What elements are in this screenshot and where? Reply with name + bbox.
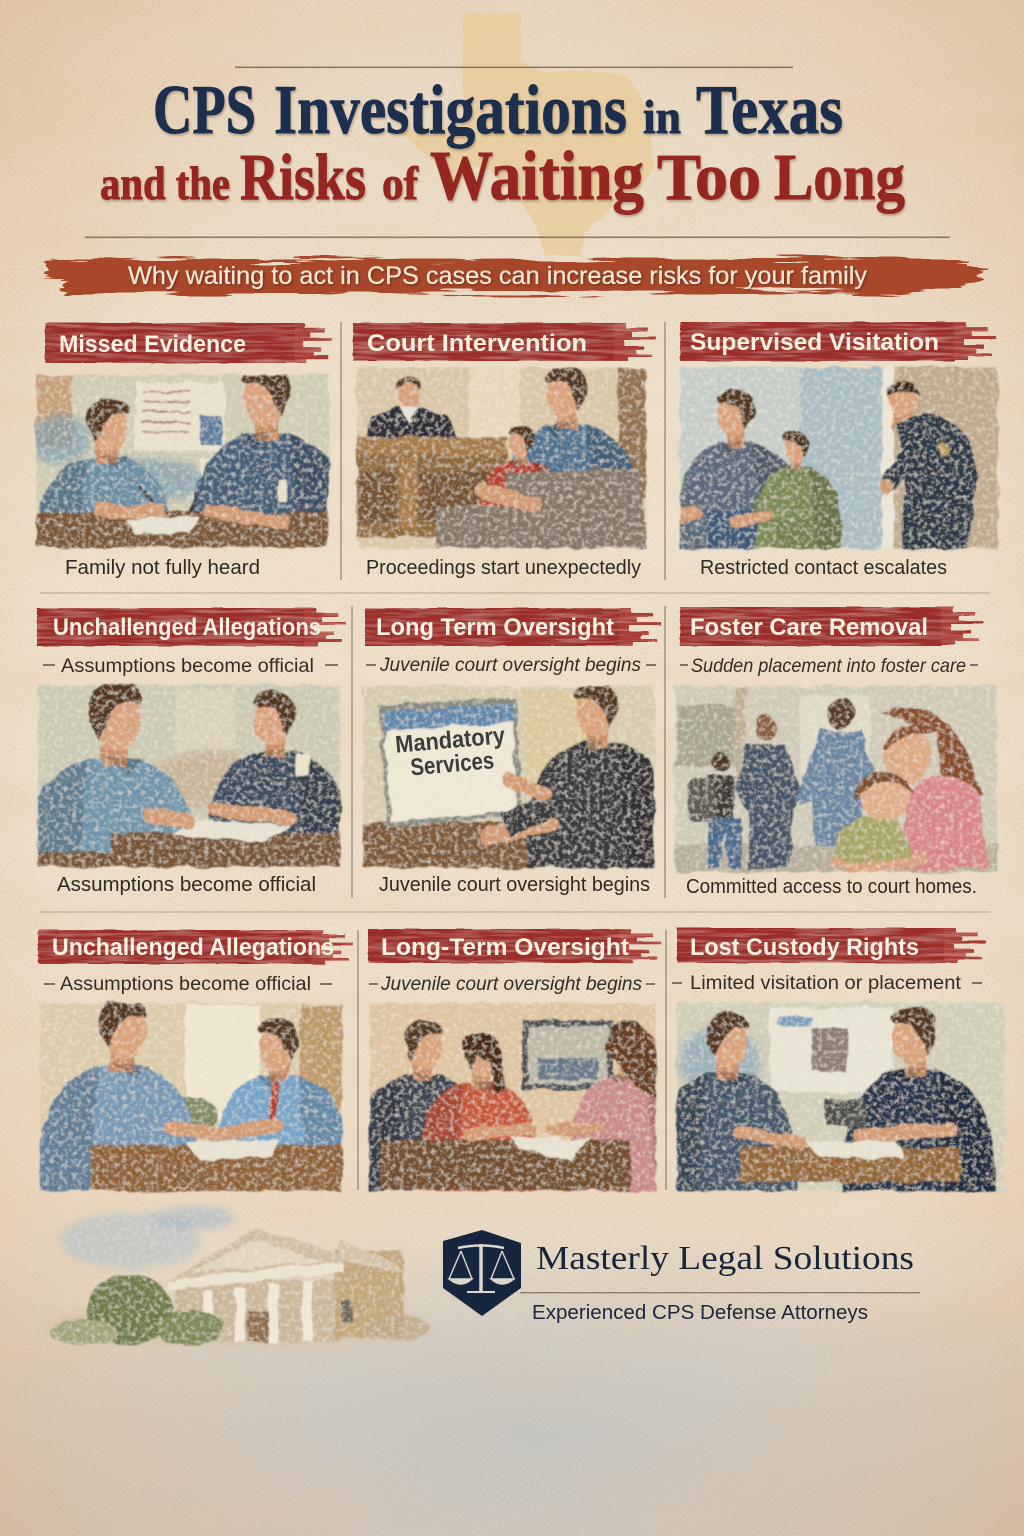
panel: Court Intervention xyxy=(350,323,656,579)
panel: Supervised Visitation xyxy=(641,322,1005,579)
subheading: Assumptions become official xyxy=(61,655,314,677)
title rule top xyxy=(235,66,793,68)
panel: Long Term Oversight (row 2) xyxy=(355,608,673,896)
heading banner: Supervised Visitation: Supervised Visitation xyxy=(690,329,939,356)
heading banner: Foster Care Removal xyxy=(690,614,928,641)
panel: Unchallenged Allegations (row 3) xyxy=(30,930,353,1239)
panel: Unchallenged Allegations (row 2) xyxy=(18,608,351,951)
illustration: courthouse xyxy=(50,1206,431,1346)
firm name: Masterly Legal Solutions xyxy=(536,1240,914,1277)
heading banner: Missed Evidence xyxy=(45,323,332,363)
illustration: parent and child with officer at a door xyxy=(641,360,1005,576)
panel: Long-Term Oversight (row 3) xyxy=(354,929,696,1214)
heading banner: Long-Term Oversight xyxy=(381,934,629,961)
illustration: child being placed while mother holds toddler xyxy=(668,680,1003,875)
mother xyxy=(880,707,985,795)
illustration: two men talking at a table xyxy=(18,680,351,951)
subtitle banner xyxy=(45,258,985,294)
illustration: family and attorney by a monitor xyxy=(354,995,696,1214)
adult two xyxy=(828,698,854,728)
title line 1: CPS xyxy=(153,72,256,149)
panel: Lost Custody Rights xyxy=(651,928,1010,1231)
Texas map silhouette xyxy=(398,13,654,256)
heading banner: Court Intervention: Court Intervention xyxy=(367,330,587,357)
child with backpack xyxy=(711,752,729,772)
title line 2 xyxy=(100,138,905,215)
title line 2: and the xyxy=(100,158,230,210)
title xyxy=(100,72,905,215)
subheading: Sudden placement into foster care xyxy=(691,655,966,677)
rule xyxy=(520,1292,920,1293)
subtitle banner: Why waiting to act in CPS cases can increase risks for your family xyxy=(128,262,868,290)
toddler xyxy=(832,813,915,868)
sign text: Mandatory xyxy=(394,722,507,759)
sign text xyxy=(394,722,509,783)
title line 2: of xyxy=(382,158,419,210)
adult one xyxy=(755,713,777,741)
heading banner: Long Term Oversight xyxy=(376,614,614,641)
caption: Family not fully heard xyxy=(65,557,260,579)
subheading: Juvenile court oversight begins xyxy=(380,973,642,995)
heading banner xyxy=(677,928,986,963)
title line 1: in xyxy=(643,91,681,144)
illustration: mandatory services sign xyxy=(355,680,673,896)
icon: shield with scales of justice xyxy=(443,1230,521,1316)
title line 1: Texas xyxy=(696,72,843,149)
illustration: parent meeting with police officer xyxy=(651,995,1010,1231)
caption: Proceedings start unexpectedly xyxy=(366,557,641,579)
dividers xyxy=(40,322,990,1190)
panel: Foster Care Removal xyxy=(668,607,1003,898)
heading banner: Unchallenged Allegations xyxy=(53,614,321,641)
footer logo block xyxy=(443,1230,920,1324)
heading banner: Court Intervention xyxy=(353,323,656,361)
title line 2: Waiting xyxy=(430,138,644,215)
heading banner: Lost Custody Rights xyxy=(690,934,919,961)
subheading: Limited visitation or placement xyxy=(690,972,962,994)
title line 2: Risks xyxy=(240,141,366,214)
caption: Assumptions become official xyxy=(57,874,316,896)
subheading: Juvenile court oversight begins xyxy=(379,654,641,676)
heading banner: Unchallenged Allegations xyxy=(52,934,334,961)
heading banner xyxy=(37,608,346,646)
illustration: judge on bench with parent and child xyxy=(350,360,650,573)
title line 2: Too xyxy=(657,141,761,214)
caption: Juvenile court oversight begins xyxy=(379,874,650,896)
title rule bottom xyxy=(85,236,950,238)
illustration: two people at a table with documents xyxy=(20,364,353,606)
heading banner: Supervised Visitation xyxy=(680,322,996,361)
heading banner xyxy=(365,608,661,646)
subheading: Assumptions become official xyxy=(60,973,311,995)
caption: Restricted contact escalates xyxy=(700,557,947,579)
caption: Committed access to court homes. xyxy=(686,876,977,898)
heading banner xyxy=(368,929,661,963)
panel: Missed Evidence xyxy=(20,323,353,606)
title line 1: Investigations xyxy=(274,72,627,149)
title line 1 xyxy=(153,72,843,149)
tagline: Experienced CPS Defense Attorneys xyxy=(532,1302,868,1324)
sign text: Services xyxy=(409,747,495,781)
title line 2: Long xyxy=(774,141,905,214)
heading banner xyxy=(680,607,983,646)
illustration: client and attorney handshake xyxy=(30,995,350,1239)
heading banner: Missed Evidence: Missed Evidence xyxy=(59,331,246,358)
